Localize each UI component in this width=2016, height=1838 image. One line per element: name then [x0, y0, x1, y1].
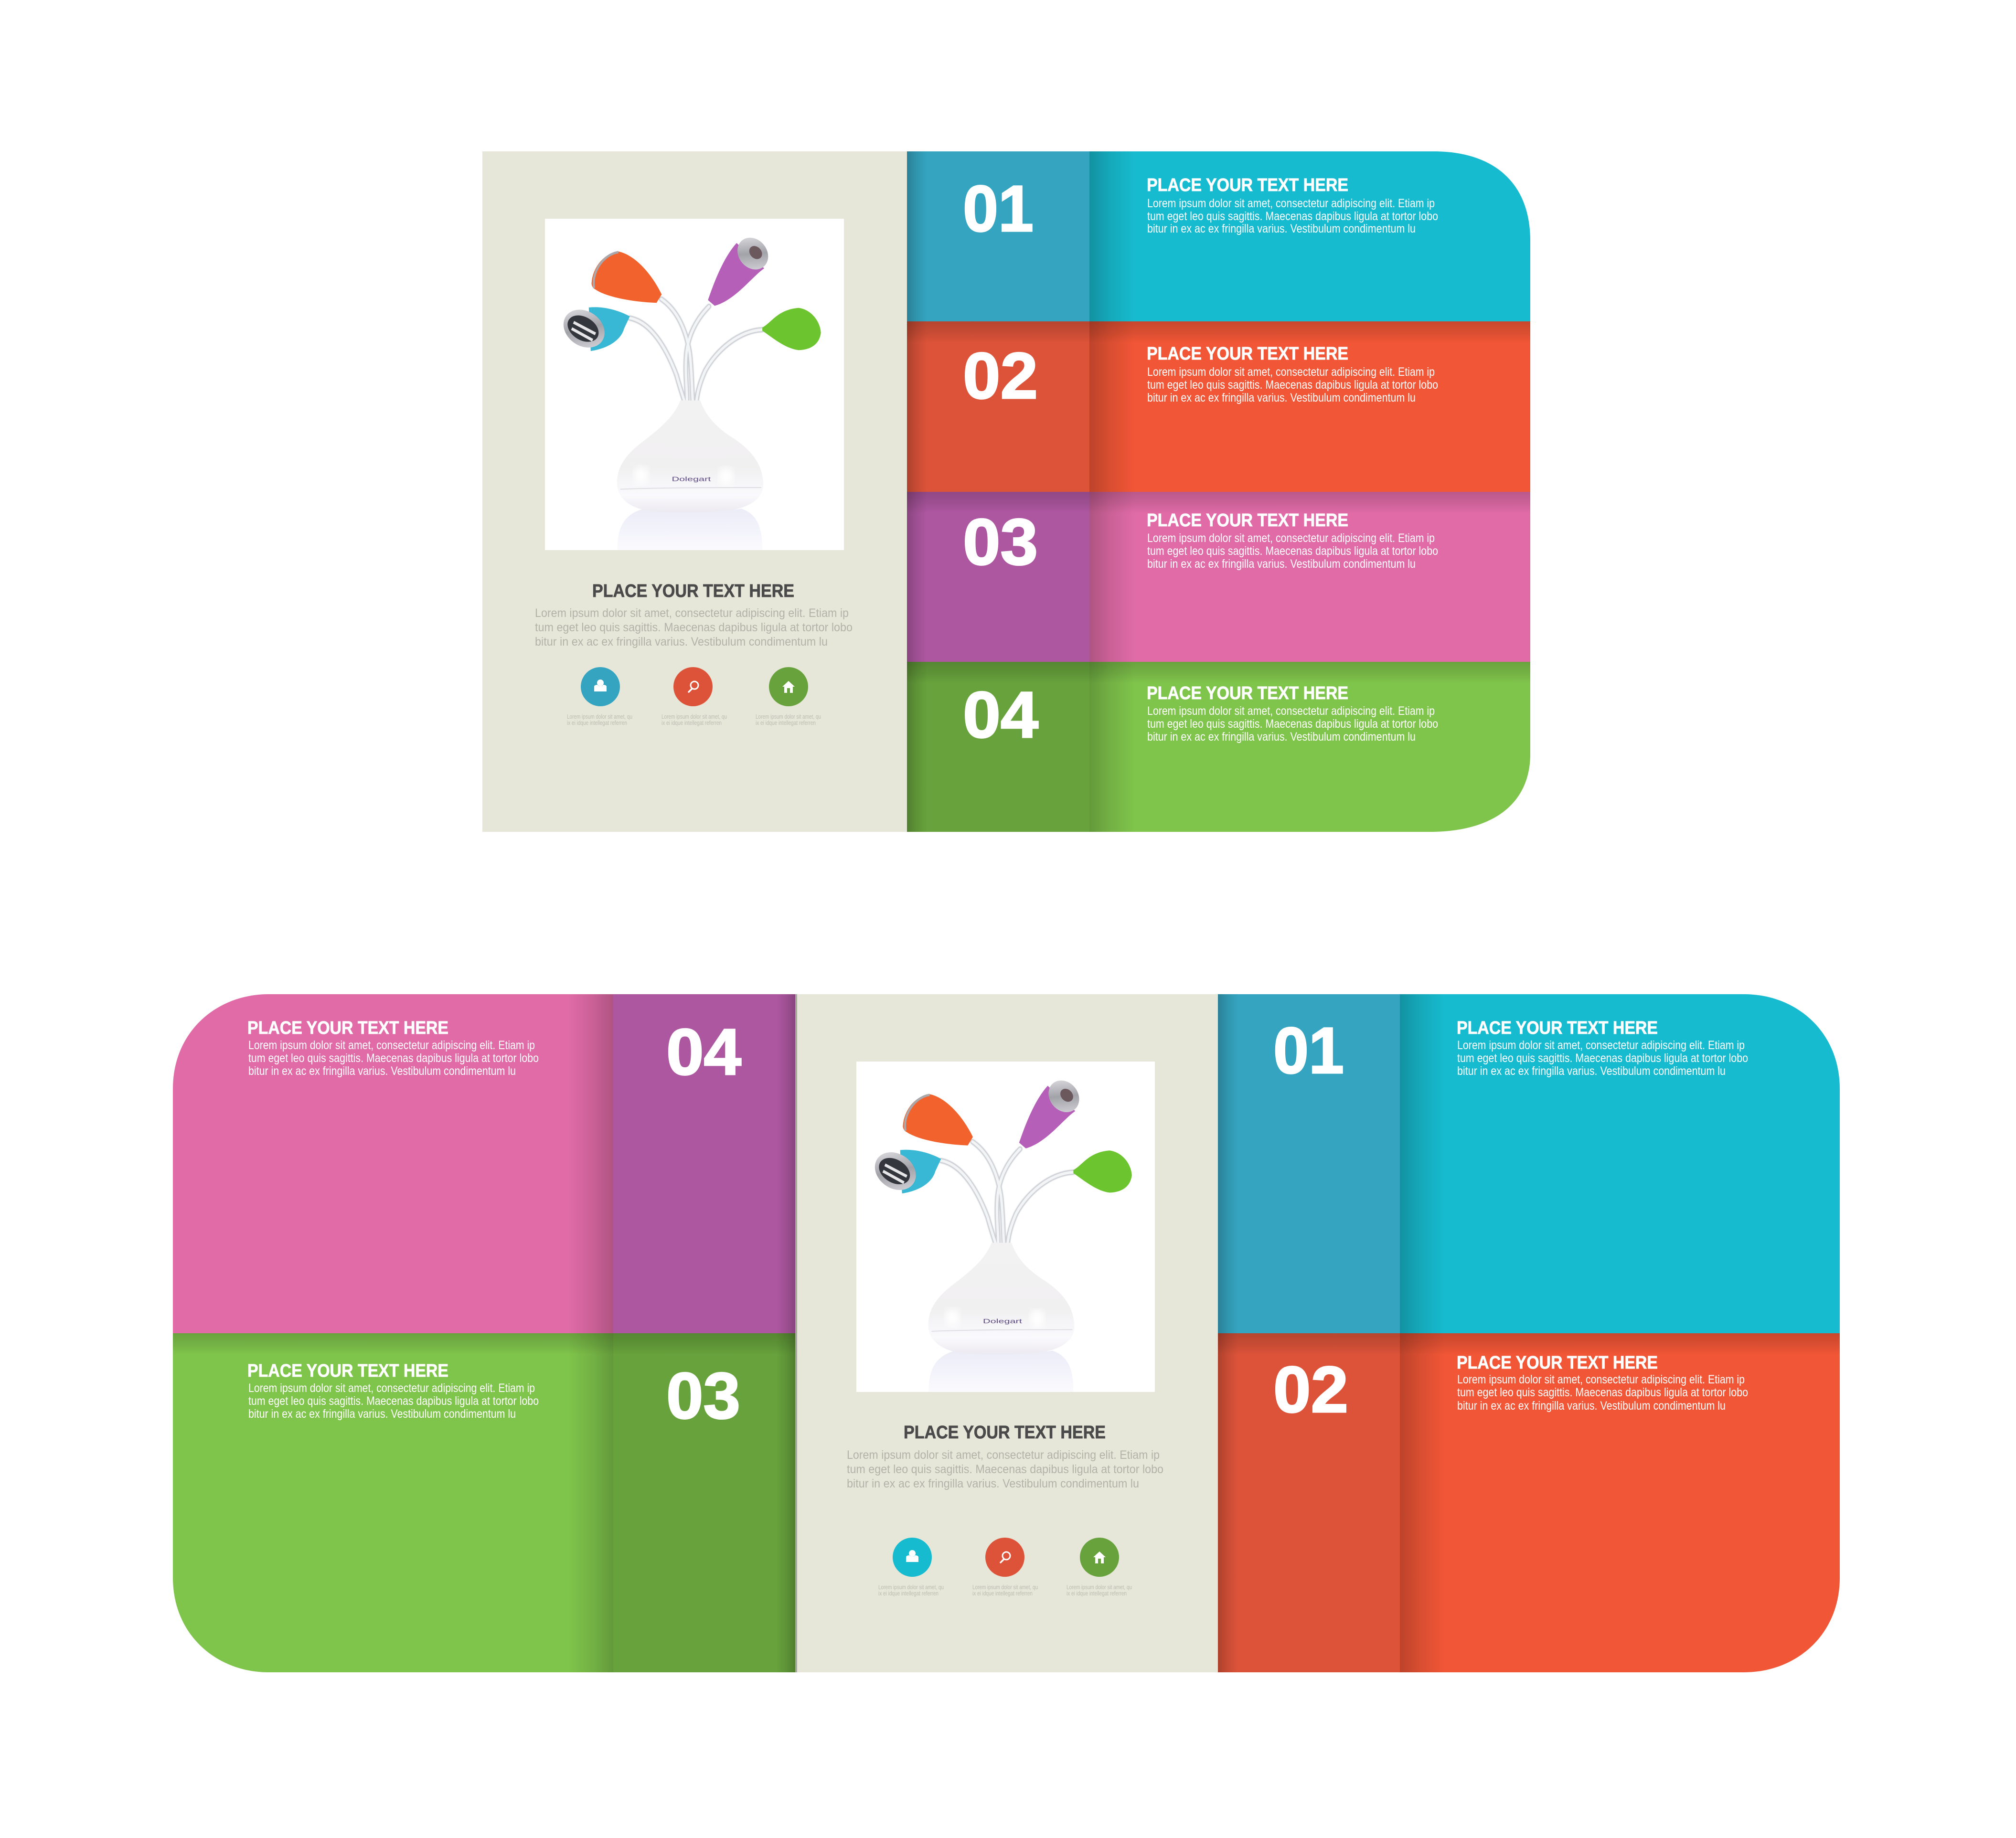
text: step 02: tum eget leo quis sagittis. Maecenas dapibus ligula at tortor lobo	[1147, 378, 1438, 392]
text: product card description: Lorem ipsum dolor sit amet, consectetur adipiscing elit. Etiam ip	[535, 606, 849, 620]
icon: home	[769, 667, 808, 706]
text: icon captions: ix ei idque intellegat referren	[756, 719, 816, 726]
text: cyan card: tum eget leo quis sagittis. Maecenas dapibus ligula at tortor lobo	[1457, 1052, 1748, 1065]
text: icon captions: Lorem ipsum dolor sit amet, qu	[1067, 1583, 1132, 1591]
text: cyan card: Lorem ipsum dolor sit amet, consectetur adipiscing elit. Etiam ip	[1457, 1039, 1745, 1052]
text: icon captions: Lorem ipsum dolor sit amet, qu	[567, 713, 632, 720]
icon: person	[581, 667, 620, 706]
text: orange card: Lorem ipsum dolor sit amet, consectetur adipiscing elit. Etiam ip	[1457, 1373, 1745, 1386]
number: 04: 04	[666, 1016, 741, 1089]
text: icon captions	[878, 1583, 1132, 1597]
panel: bottom layout	[173, 994, 1840, 1672]
text: product card description: tum eget leo quis sagittis. Maecenas dapibus ligula at tortor lobo	[847, 1463, 1163, 1476]
text: step 01: bitur in ex ac ex fringilla varius. Vestibulum condimentum lu	[1147, 222, 1416, 235]
text: step 03: bitur in ex ac ex fringilla varius. Vestibulum condimentum lu	[1147, 557, 1416, 571]
text: step 01: tum eget leo quis sagittis. Maecenas dapibus ligula at tortor lobo	[1147, 210, 1438, 223]
text: icon captions	[567, 713, 821, 726]
number: 02: 02	[1273, 1353, 1348, 1426]
panel: bottom product card	[795, 994, 1218, 1672]
text: step 02	[1147, 365, 1438, 404]
text: step 03: tum eget leo quis sagittis. Maecenas dapibus ligula at tortor lobo	[1147, 544, 1438, 558]
heading: step 01: PLACE YOUR TEXT HERE	[1147, 175, 1348, 195]
text: step 04: tum eget leo quis sagittis. Maecenas dapibus ligula at tortor lobo	[1147, 717, 1438, 731]
panel: bottom right orange card	[1218, 1333, 1840, 1672]
text: pink card	[248, 1039, 539, 1078]
number: 01: 01	[963, 172, 1034, 245]
number: 03: 03	[666, 1360, 740, 1433]
text: icon captions: ix ei idque intellegat referren	[661, 719, 722, 726]
text: step 03: Lorem ipsum dolor sit amet, consectetur adipiscing elit. Etiam ip	[1147, 531, 1435, 545]
text: icon captions: Lorem ipsum dolor sit amet, qu	[972, 1583, 1038, 1591]
image: USB flower hub (top)	[545, 219, 844, 550]
heading: product card: PLACE YOUR TEXT HERE	[904, 1423, 1106, 1443]
text: green card: Lorem ipsum dolor sit amet, consectetur adipiscing elit. Etiam ip	[248, 1381, 535, 1395]
panel: bottom right cyan card	[1218, 994, 1840, 1333]
panel: step 04	[907, 662, 1530, 832]
text: product card description: bitur in ex ac ex fringilla varius. Vestibulum condimentum lu	[847, 1477, 1139, 1490]
icon: magnifier	[985, 1538, 1024, 1577]
panel: bottom left pink card	[173, 994, 795, 1333]
number: 04: 04	[963, 679, 1038, 752]
text: product card description	[535, 606, 853, 648]
icon: home	[1080, 1538, 1119, 1577]
icon: person	[893, 1538, 932, 1577]
text: pink card: tum eget leo quis sagittis. Maecenas dapibus ligula at tortor lobo	[248, 1052, 539, 1065]
panel: step 01	[907, 151, 1530, 321]
text: icon captions: ix ei idque intellegat referren	[567, 719, 627, 726]
heading: pink card: PLACE YOUR TEXT HERE	[247, 1018, 448, 1038]
panel: step 03	[907, 492, 1530, 662]
panel: top layout	[482, 151, 1530, 832]
text: green card	[248, 1381, 539, 1421]
text: icon captions: Lorem ipsum dolor sit amet, qu	[756, 713, 821, 720]
heading: orange card: PLACE YOUR TEXT HERE	[1457, 1353, 1658, 1373]
text: cyan card	[1457, 1039, 1748, 1078]
text: step 04: bitur in ex ac ex fringilla varius. Vestibulum condimentum lu	[1147, 730, 1416, 744]
heading: step 03: PLACE YOUR TEXT HERE	[1147, 510, 1348, 531]
text: product card description	[847, 1448, 1163, 1490]
text: step 04	[1147, 704, 1438, 744]
text: orange card: bitur in ex ac ex fringilla varius. Vestibulum condimentum lu	[1457, 1399, 1726, 1413]
number: 03: 03	[963, 506, 1038, 579]
text: step 02: Lorem ipsum dolor sit amet, consectetur adipiscing elit. Etiam ip	[1147, 365, 1435, 379]
panel: top product card	[482, 151, 907, 832]
icon: magnifier	[673, 667, 713, 706]
text: step 02: bitur in ex ac ex fringilla varius. Vestibulum condimentum lu	[1147, 391, 1416, 404]
panel: bottom left green card	[173, 1333, 795, 1672]
text: icon captions: Lorem ipsum dolor sit amet, qu	[661, 713, 727, 720]
text: icon captions: ix ei idque intellegat referren	[972, 1590, 1033, 1597]
panel: step 02	[907, 321, 1530, 492]
text: product card description: tum eget leo quis sagittis. Maecenas dapibus ligula at tortor lobo	[535, 621, 853, 634]
heading: cyan card: PLACE YOUR TEXT HERE	[1457, 1018, 1658, 1038]
text: green card: tum eget leo quis sagittis. Maecenas dapibus ligula at tortor lobo	[248, 1394, 539, 1408]
number: 01: 01	[1273, 1014, 1344, 1087]
text: icon captions: ix ei idque intellegat referren	[1067, 1590, 1127, 1597]
text: green card: bitur in ex ac ex fringilla varius. Vestibulum condimentum lu	[248, 1407, 516, 1421]
text: icon captions: Lorem ipsum dolor sit amet, qu	[878, 1583, 944, 1591]
text: cyan card: bitur in ex ac ex fringilla varius. Vestibulum condimentum lu	[1457, 1064, 1726, 1078]
number: 02: 02	[963, 340, 1038, 413]
heading: green card: PLACE YOUR TEXT HERE	[247, 1361, 448, 1381]
heading: step 02: PLACE YOUR TEXT HERE	[1147, 344, 1348, 364]
text: step 01: Lorem ipsum dolor sit amet, consectetur adipiscing elit. Etiam ip	[1147, 197, 1435, 210]
image: USB flower hub (bottom): Dolegart	[983, 1318, 1023, 1325]
text: step 01	[1147, 197, 1438, 235]
text: step 03	[1147, 531, 1438, 571]
text: icon captions: ix ei idque intellegat referren	[878, 1590, 939, 1597]
text: orange card	[1457, 1373, 1748, 1413]
text: product card description: bitur in ex ac ex fringilla varius. Vestibulum condimentum lu	[535, 635, 828, 648]
text: pink card: bitur in ex ac ex fringilla varius. Vestibulum condimentum lu	[248, 1064, 516, 1078]
text: orange card: tum eget leo quis sagittis. Maecenas dapibus ligula at tortor lobo	[1457, 1386, 1748, 1399]
image: USB flower hub (bottom)	[856, 1062, 1155, 1392]
heading: step 04: PLACE YOUR TEXT HERE	[1147, 683, 1348, 703]
text: step 04: Lorem ipsum dolor sit amet, consectetur adipiscing elit. Etiam ip	[1147, 704, 1435, 718]
heading: product card: PLACE YOUR TEXT HERE	[592, 581, 794, 601]
text: pink card: Lorem ipsum dolor sit amet, consectetur adipiscing elit. Etiam ip	[248, 1039, 535, 1052]
text: product card description: Lorem ipsum dolor sit amet, consectetur adipiscing elit. Etiam ip	[847, 1448, 1160, 1462]
image: USB flower hub (top): Dolegart	[672, 476, 711, 483]
